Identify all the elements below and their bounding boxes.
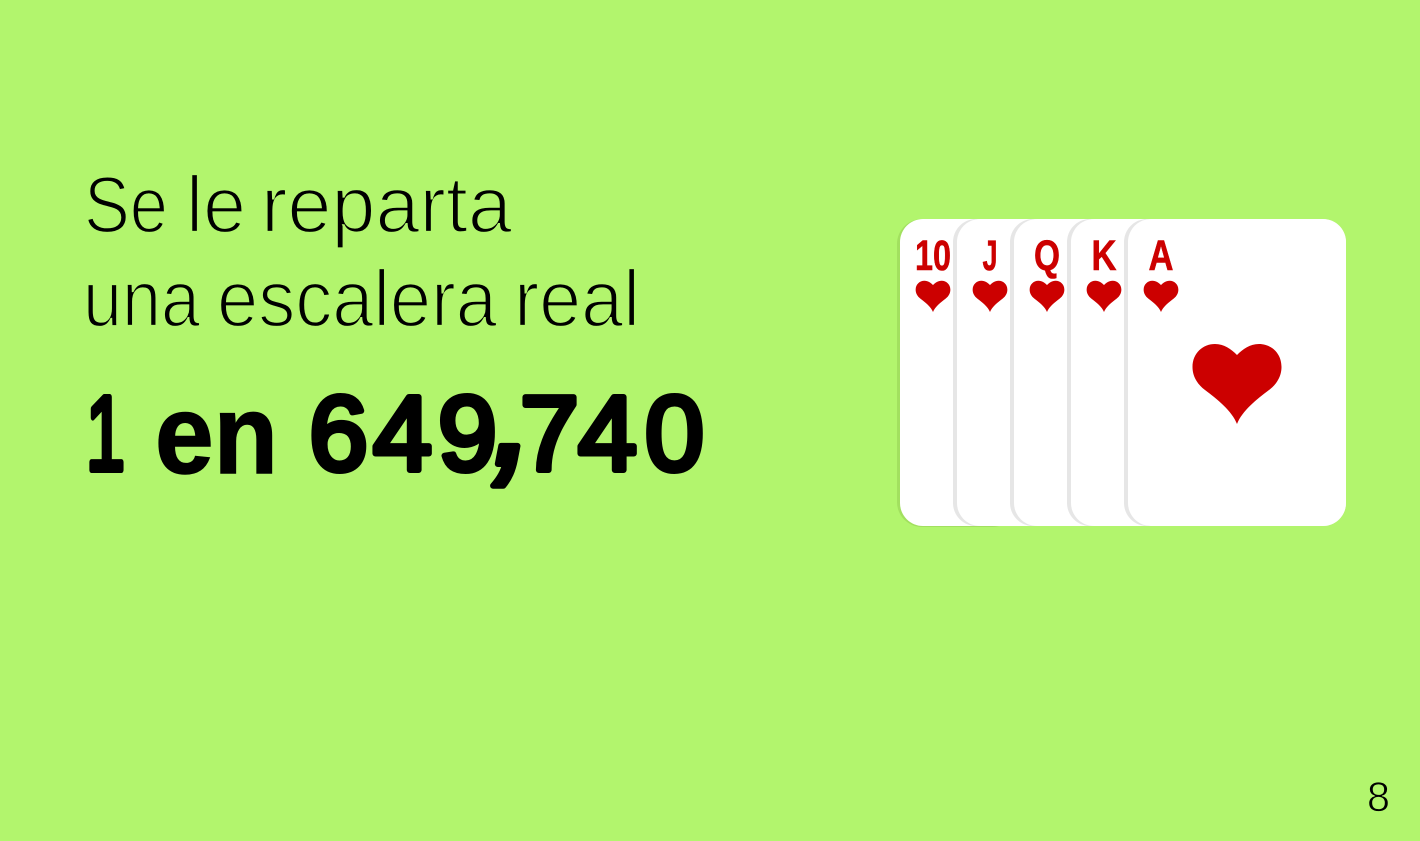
heading: event description: escalera xyxy=(217,254,497,343)
odds figure xyxy=(86,311,704,501)
page number: 8 xyxy=(1367,773,1390,820)
heading: event description: le xyxy=(186,160,246,249)
odds figure: en xyxy=(155,372,278,497)
heading: event description xyxy=(83,160,640,343)
odds figure: 4 xyxy=(373,375,432,493)
odds figure: 1 xyxy=(86,375,125,493)
card: A of hearts: A xyxy=(1148,232,1174,280)
heading: event description: una xyxy=(83,254,200,343)
card: J of hearts: J xyxy=(982,232,998,280)
hand of cards: royal flush of hearts xyxy=(897,219,1346,527)
card: K of hearts xyxy=(1067,219,1191,526)
card: Q of hearts xyxy=(1010,219,1134,526)
odds figure: 9 xyxy=(438,375,497,493)
card: J of hearts xyxy=(953,219,1077,526)
odds figure: 4 xyxy=(578,375,637,493)
icon: large heart xyxy=(1192,344,1282,424)
heading: event description: reparta xyxy=(261,160,512,249)
odds figure: , xyxy=(490,311,537,501)
card: 10 of hearts xyxy=(897,219,1020,527)
heading: event description: real xyxy=(514,254,640,343)
card: K of hearts: K xyxy=(1092,232,1116,280)
card: 10 of hearts: 10 xyxy=(915,232,951,280)
odds figure: 6 xyxy=(309,375,368,493)
card: A of hearts xyxy=(1124,219,1346,526)
heading: event description: Se xyxy=(84,160,168,249)
odds figure: 0 xyxy=(645,375,704,493)
odds figure: 7 xyxy=(520,375,579,493)
card: Q of hearts: Q xyxy=(1034,232,1060,280)
